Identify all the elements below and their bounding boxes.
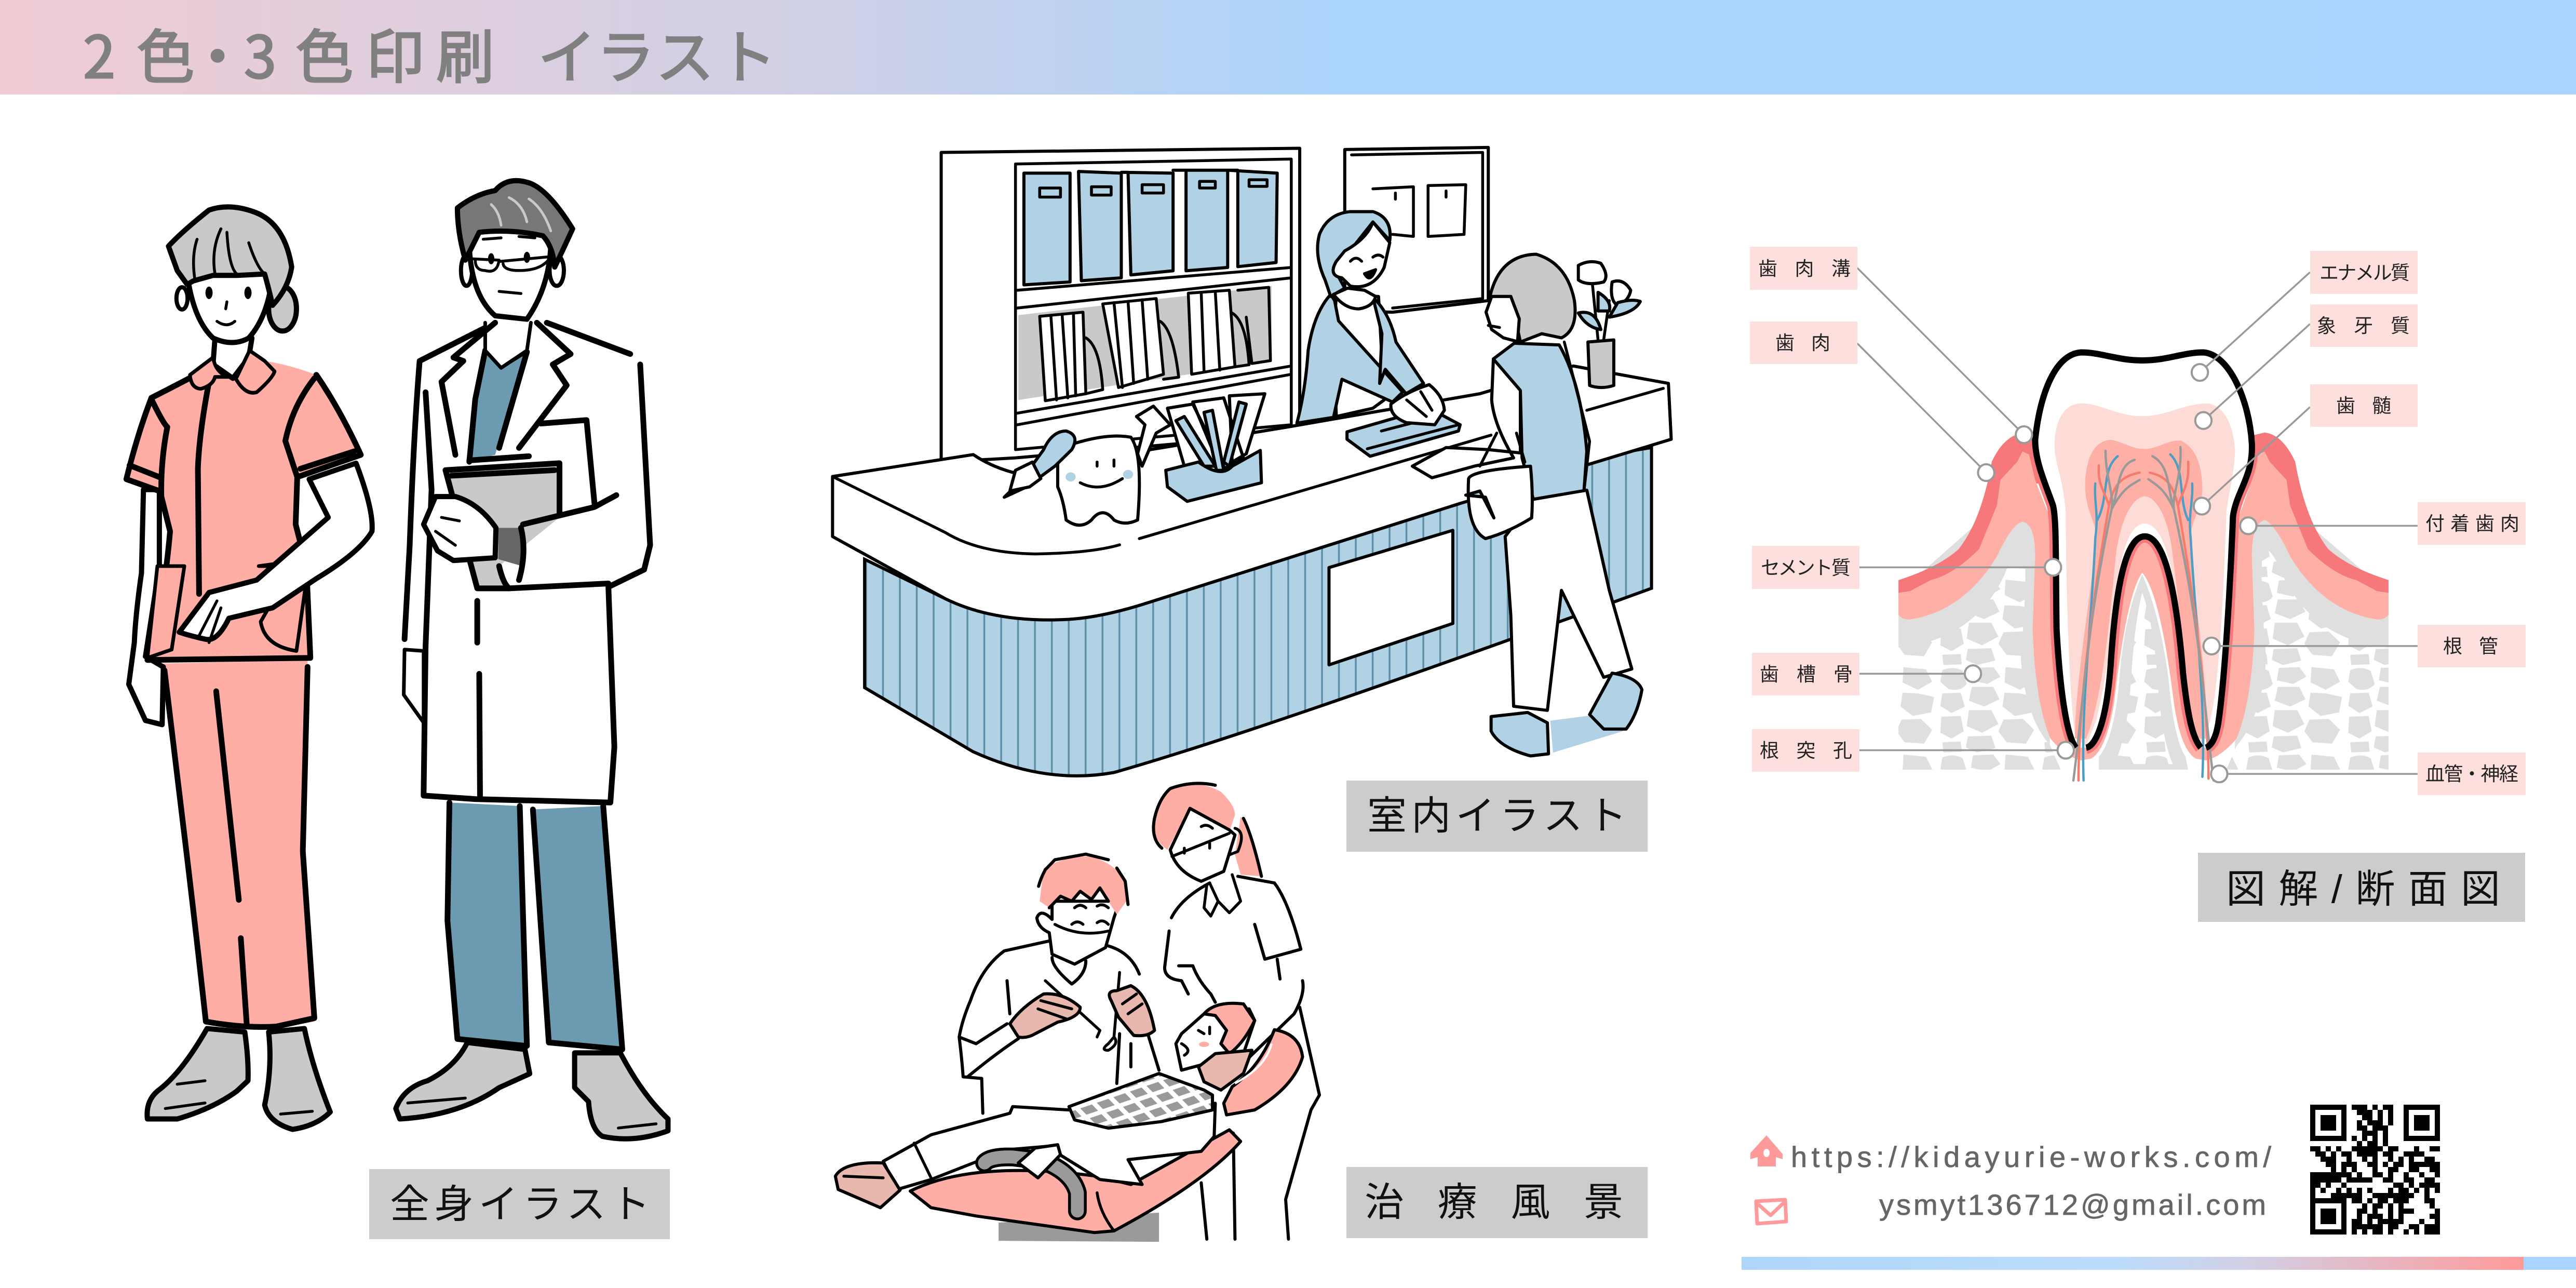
tooth labels: 歯髄 [2336,395,2391,417]
periodontal edge [2035,440,2252,748]
leader lines [1857,268,2418,774]
receptionist [1297,211,1424,423]
label: interior [1346,781,1648,852]
qr code [2310,1105,2440,1235]
tooth outline [2035,353,2252,748]
label: cross-section: 図解/断面図 [2226,867,2500,911]
dental chair [910,1030,1302,1242]
counter [832,366,1671,776]
label: interior: 室内イラスト [1367,794,1627,838]
patient at counter [1412,254,1642,756]
dentin [2055,404,2235,746]
label: cross-section [2198,853,2525,922]
label: full-body [369,1169,670,1239]
label: full-body: 全身イラスト [390,1183,650,1227]
diagram: tooth cross-section [1750,247,2526,795]
tooth labels: 根突孔 [1760,740,1852,761]
gum [1898,433,2389,760]
callout dots [1965,364,2257,782]
notice board [1345,147,1488,312]
hygienist [1153,783,1319,1239]
tooth labels: エナメル質 [2319,262,2410,284]
footer gradient bar [1742,1257,2576,1270]
tooth labels: 象牙質 [2317,315,2410,337]
tooth mascot [1004,406,1170,525]
header bar [0,0,2576,95]
figure: dental treatment scene [835,783,1319,1242]
patient [835,1003,1255,1211]
label: treatment: 治療風景 [1365,1180,1623,1225]
tooth labels: 血管・神経 [2425,763,2518,785]
bookcase [941,149,1300,462]
tooth labels: 歯肉 [1775,332,1830,354]
figure: reception interior scene [832,147,1671,776]
tooth labels: 歯肉溝 [1758,258,1851,279]
tray and hands on counter [1347,385,1460,456]
tooth labels: セメント質 [1761,557,1851,579]
figure: nurse and doctor full body [126,181,668,1139]
brush holder [1166,394,1265,501]
icon: home [1750,1135,1783,1166]
doctor [396,181,668,1139]
tooth labels: 付着歯肉 [2425,513,2519,534]
icon: mail [1756,1200,1786,1224]
nerves and vessels [2073,447,2214,781]
tooth labels: 根管 [2443,636,2498,657]
vase and flowers [1579,262,1640,387]
label: treatment [1346,1167,1648,1238]
pulp [2075,440,2206,739]
dentist [959,854,1159,1113]
alveolar bone [1898,513,2389,770]
tooth body [2035,353,2252,748]
title: 2色・3色印刷イラスト [83,11,776,95]
tooth labels [1750,247,2526,795]
email: ysmyt136712@gmail.com [1879,1188,2266,1221]
tooth labels: 歯槽骨 [1760,664,1853,685]
contact block [1750,1105,2440,1235]
nurse [126,207,372,1130]
url: https://kidayurie-works.com/ [1791,1141,2271,1173]
